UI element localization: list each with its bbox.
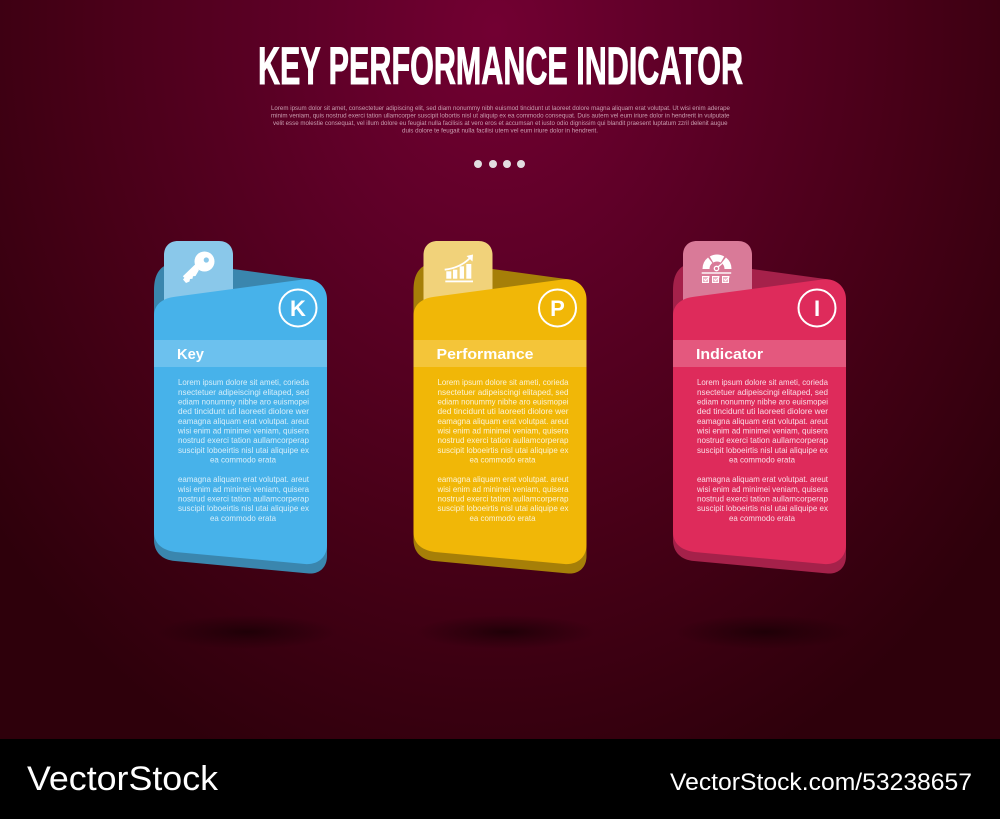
body text: ea commodo erata bbox=[729, 454, 795, 464]
body text: suscipit loboeirtis nisl utai aliquipe ex bbox=[697, 445, 829, 455]
body text: suscipit loboeirtis nisl utai aliquipe ex bbox=[178, 503, 310, 513]
panel: performance bbox=[414, 241, 586, 574]
body text: wisi enim ad minimei veniam, quisera bbox=[437, 426, 569, 436]
body text: ea commodo erata bbox=[210, 513, 276, 523]
footer logo: VectorStock bbox=[27, 760, 219, 798]
body text: nostrud exerci tation aullamcorperap bbox=[697, 435, 828, 445]
intro text: minim veniam, quis nostrud exerci tation ullamcorper suscipit lobortis nisl ut aliquip ex ea commodo consequat. Duis autem vel eum iriure dolor in hendrerit in vulputate bbox=[271, 114, 730, 120]
body text: ded tincidunt uti laoreeti diolore wer bbox=[178, 406, 309, 416]
heading band bbox=[154, 340, 327, 367]
body text: eamagna aliquam erat volutpat. areut bbox=[697, 474, 829, 484]
letter badge bbox=[280, 290, 316, 326]
body text: Lorem ipsum dolore sit ameti, corieda bbox=[178, 377, 309, 387]
heading band bbox=[673, 340, 846, 367]
card front bbox=[673, 279, 846, 564]
body text: suscipit loboeirtis nisl utai aliquipe ex bbox=[178, 445, 310, 455]
body text bbox=[696, 377, 829, 523]
intro text: Lorem ipsum dolor sit amet, consectetuer adipiscing elit, sed diam nonummy nibh euismod tincidunt ut laoreet dolore magna aliquam erat volutpat. Ut wisi enim aderape bbox=[271, 106, 731, 112]
icon: gauge with checklist bbox=[702, 258, 731, 282]
icon: key bbox=[183, 252, 214, 283]
panel: key bbox=[154, 241, 327, 574]
letter badge bbox=[798, 290, 836, 326]
body text: ded tincidunt uti laoreeti diolore wer bbox=[438, 406, 569, 416]
body text: wisi enim ad minimei veniam, quisera bbox=[437, 484, 569, 494]
tab bbox=[164, 241, 233, 300]
tab bbox=[424, 241, 492, 300]
body text: wisi enim ad minimei veniam, quisera bbox=[177, 426, 309, 436]
body text: ediam nonummy nibhe aro euismopei bbox=[697, 396, 828, 406]
body text: eamagna aliquam erat volutpat. areut bbox=[697, 416, 829, 426]
shadow: key card bbox=[157, 615, 337, 649]
body text: Lorem ipsum dolore sit ameti, corieda bbox=[697, 377, 828, 387]
card back bbox=[414, 265, 586, 574]
body text: ded tincidunt uti laoreeti diolore wer bbox=[697, 406, 828, 416]
body text: nsectetuer adipeiscingi elitaped, sed bbox=[178, 387, 309, 397]
body text: ea commodo erata bbox=[470, 513, 536, 523]
body text: eamagna aliquam erat volutpat. areut bbox=[438, 474, 569, 484]
footer image id: VectorStock.com/53238657 bbox=[670, 769, 972, 796]
body text: eamagna aliquam erat volutpat. areut bbox=[438, 416, 569, 426]
body text: ea commodo erata bbox=[210, 454, 276, 464]
body text: wisi enim ad minimei veniam, quisera bbox=[696, 426, 828, 436]
body text: nostrud exerci tation aullamcorperap bbox=[178, 494, 309, 504]
body text: suscipit loboeirtis nisl utai aliquipe ex bbox=[697, 503, 829, 513]
intro text bbox=[271, 106, 731, 134]
icon: growth chart bbox=[445, 254, 473, 282]
body text: wisi enim ad minimei veniam, quisera bbox=[696, 484, 828, 494]
heading band: Key bbox=[177, 346, 205, 363]
body text: Lorem ipsum dolore sit ameti, corieda bbox=[438, 377, 569, 387]
body text: nostrud exerci tation aullamcorperap bbox=[438, 494, 569, 504]
heading band bbox=[414, 340, 586, 367]
body text bbox=[437, 377, 569, 523]
letter badge: I bbox=[814, 296, 820, 321]
shadow: indicator card bbox=[675, 615, 855, 649]
body text: nostrud exerci tation aullamcorperap bbox=[697, 494, 828, 504]
intro text: duis dolore te feugait nulla facilisi utem vel eum iriure dolor in hendrerit. bbox=[402, 128, 598, 134]
letter badge bbox=[539, 290, 576, 326]
tab bbox=[683, 241, 752, 300]
body text bbox=[177, 377, 310, 523]
body text: ediam nonummy nibhe aro euismopei bbox=[438, 396, 569, 406]
card back bbox=[673, 265, 846, 574]
panel: indicator bbox=[673, 241, 846, 574]
intro text: velit esse molestie consequat, vel illum dolore eu feugiat nulla facilisis at vero eros et accumsan et iusto odio dignissim qui blandit praesent luptatum zzril delenit augue bbox=[273, 121, 728, 127]
card front bbox=[414, 279, 586, 564]
letter badge: K bbox=[290, 296, 306, 321]
body text: suscipit loboeirtis nisl utai aliquipe ex bbox=[438, 503, 569, 513]
pagination dots bbox=[474, 160, 525, 168]
body text: nsectetuer adipeiscingi elitaped, sed bbox=[438, 387, 569, 397]
letter badge: P bbox=[550, 296, 565, 321]
body text: ediam nonummy nibhe aro euismopei bbox=[178, 396, 309, 406]
card front bbox=[154, 279, 327, 564]
body text: nostrud exerci tation aullamcorperap bbox=[438, 435, 569, 445]
body text: wisi enim ad minimei veniam, quisera bbox=[177, 484, 309, 494]
body text: nsectetuer adipeiscingi elitaped, sed bbox=[697, 387, 828, 397]
body text: eamagna aliquam erat volutpat. areut bbox=[178, 416, 310, 426]
body text: suscipit loboeirtis nisl utai aliquipe ex bbox=[438, 445, 569, 455]
body text: ea commodo erata bbox=[470, 454, 536, 464]
footer bar bbox=[0, 739, 1000, 819]
card back bbox=[154, 265, 327, 574]
heading band: Indicator bbox=[696, 346, 763, 363]
heading band: Performance bbox=[436, 346, 534, 363]
body text: ea commodo erata bbox=[729, 513, 795, 523]
body text: nostrud exerci tation aullamcorperap bbox=[178, 435, 309, 445]
shadow: performance card bbox=[416, 615, 596, 649]
body text: eamagna aliquam erat volutpat. areut bbox=[178, 474, 310, 484]
